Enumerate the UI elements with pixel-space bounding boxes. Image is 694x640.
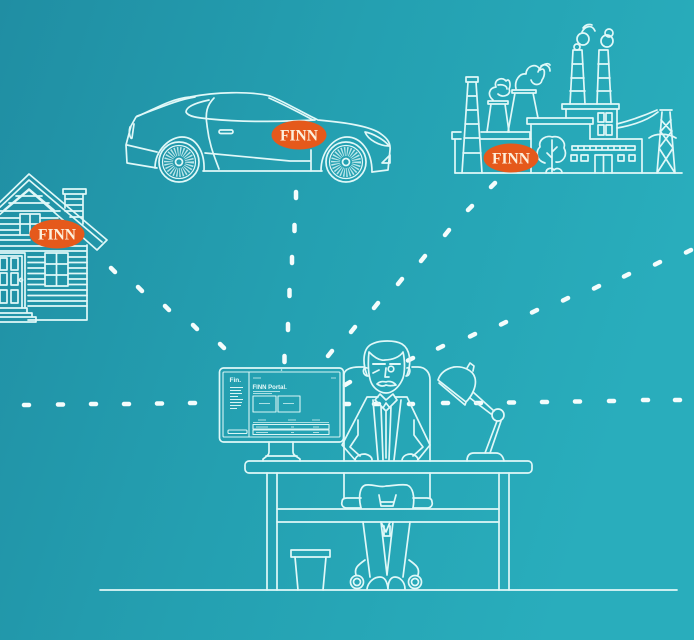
jacket [342,397,430,461]
dashed line: horizontal right [345,400,680,404]
computer monitor [220,368,344,461]
door [0,253,25,308]
tree [537,136,565,173]
left chimney [462,77,482,173]
lamp arm [470,392,501,453]
moustache and beard [377,381,396,386]
portal title: FINN Portal. [252,385,287,391]
tall chimneys [570,50,585,104]
collar and tie [375,394,397,460]
door handle [219,130,233,134]
ears [363,368,410,376]
drawer bar [277,509,499,522]
desk legs [267,473,509,590]
sidebar button [228,430,247,434]
smoke clouds [489,79,510,100]
gable window [20,214,40,235]
dashed line: right edge to desk [408,250,691,360]
body outline [126,93,390,172]
waste bin [291,550,330,590]
monitor stand [263,442,300,461]
chimney [63,189,86,224]
roof [0,174,107,250]
gable [0,189,60,211]
desk [245,461,532,590]
hands [355,454,418,460]
knees [360,485,414,508]
headlight [365,132,390,163]
businessman [342,341,430,589]
factory illustration [452,24,682,173]
car illustration [126,93,390,182]
dashed line: horizontal left [24,403,195,405]
house illustration [0,174,107,322]
FINN badge: car [272,120,326,150]
walls and siding [0,218,87,320]
chair casters [355,560,419,575]
eyes and nose [388,366,394,372]
floor line [100,589,677,591]
cooling tower 2 [508,90,538,132]
portal table [253,420,329,422]
front wheel [326,142,366,182]
FINN badge: house: FINN [38,226,76,244]
cooling tower 1 [487,101,509,132]
face [368,352,404,393]
desk top [245,461,532,473]
pylon [649,110,676,173]
chimney smoke [574,44,580,50]
FINN badge: factory [484,144,538,172]
left building [452,132,531,173]
FINN badge: factory: FINN [492,150,530,168]
side window [45,253,68,286]
lower right block [590,139,642,173]
lamp finial [467,363,474,371]
ground [455,172,682,174]
middle building [527,118,593,173]
lower legs [363,522,410,577]
dashed line: house to desk [111,268,224,348]
window line [186,100,315,121]
sidebar menu [230,388,243,408]
desk lamp [438,363,504,461]
portal logo: Fin. [230,377,241,384]
eyebrows [373,363,400,365]
lamp shade [438,367,475,402]
steps [0,308,36,322]
FINN badge: house [30,220,84,248]
portal cards [253,396,300,412]
hair [364,341,410,375]
office chair [342,367,432,588]
building windows [598,113,612,135]
power cables [617,110,658,128]
wheel arches [155,137,204,171]
dashed line: car to desk [284,192,296,362]
rear wheel [159,142,199,182]
shoes [367,577,405,589]
FINN badge: car: FINN [280,128,318,144]
lamp base [467,453,504,461]
door [595,155,612,173]
upper building [562,104,619,139]
dashed line: factory to desk [328,183,495,385]
